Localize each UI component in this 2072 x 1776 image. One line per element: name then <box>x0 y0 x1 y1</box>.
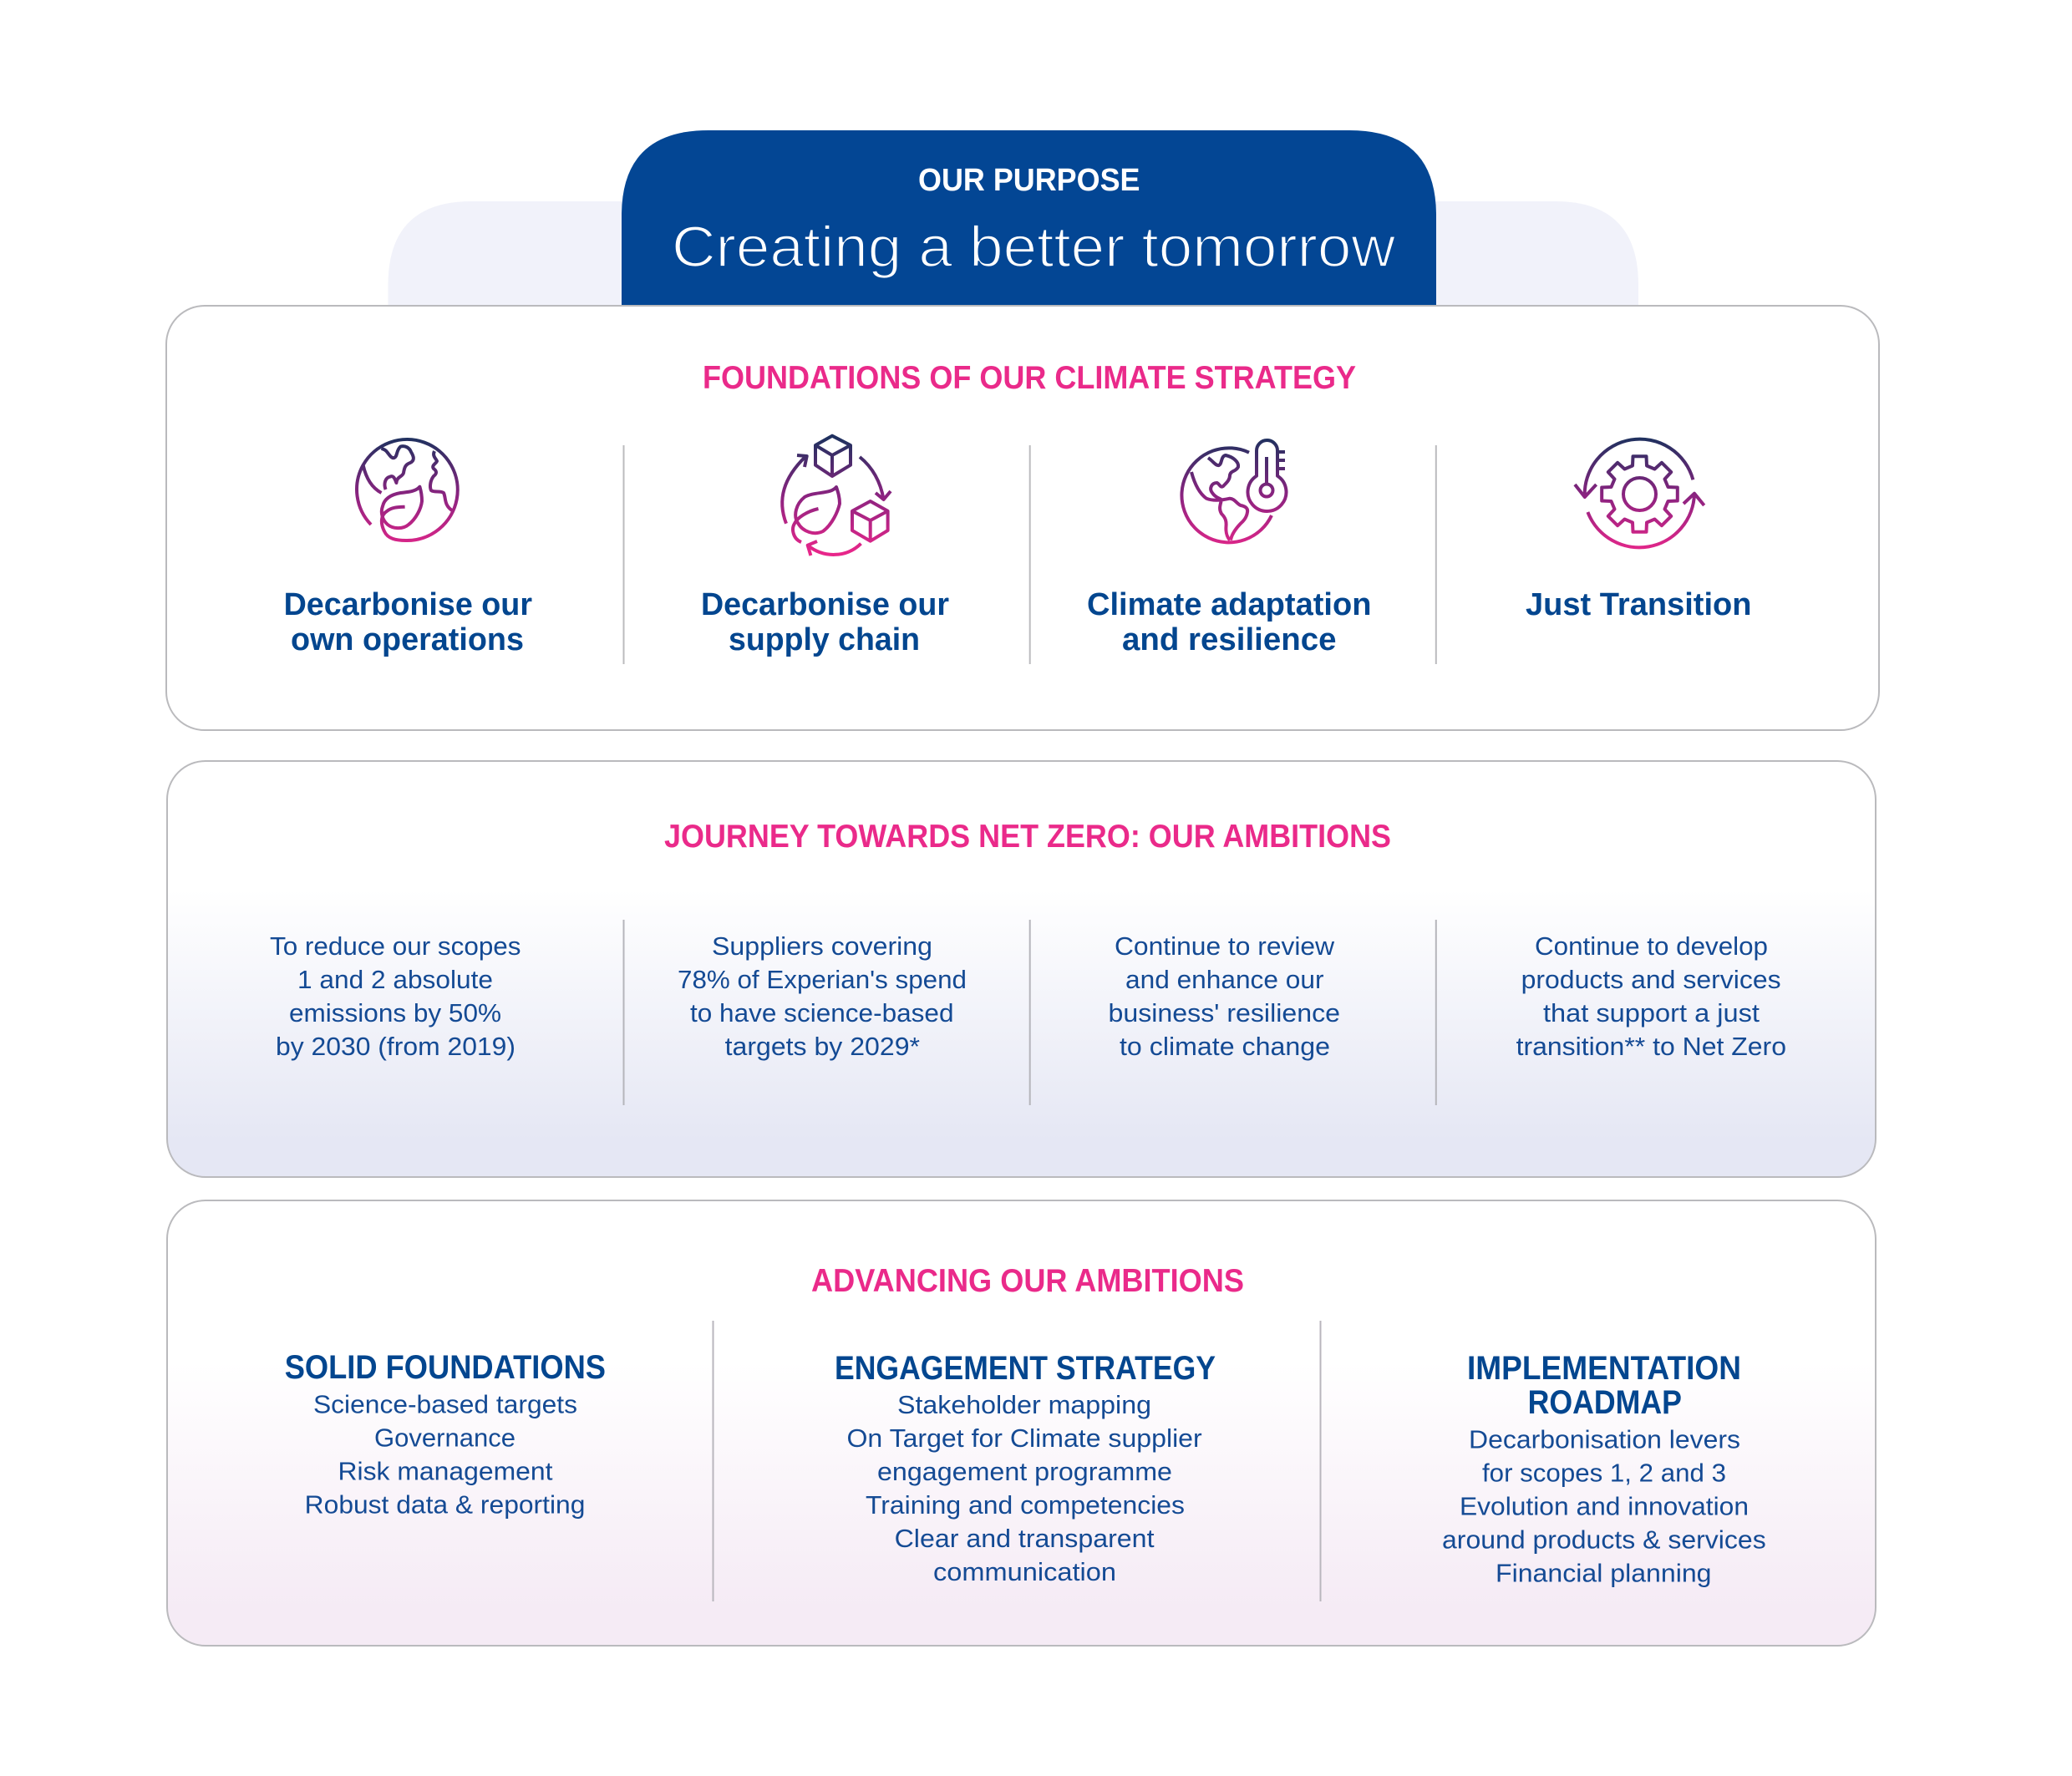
column: implementation roadmap: ROADMAP <box>1528 1384 1682 1421</box>
column: engagement strategy: Training and competencies <box>866 1490 1185 1520</box>
ambition: scopes 1 and 2: by 2030 (from 2019) <box>276 1032 515 1061</box>
ambition: resilience: to climate change <box>1120 1032 1330 1061</box>
column: implementation roadmap: Financial planning <box>1496 1559 1711 1587</box>
column: solid foundations: Governance <box>374 1423 515 1452</box>
ambition: suppliers: Suppliers covering <box>712 931 932 961</box>
ambition: suppliers: to have science-based <box>690 998 954 1028</box>
foundation: decarbonise supply chain <box>701 587 949 657</box>
ambition: resilience: Continue to review <box>1115 931 1335 961</box>
column: engagement strategy: Stakeholder mapping <box>897 1390 1151 1419</box>
icon: globe with leaf <box>357 439 458 540</box>
heading: foundations: FOUNDATIONS OF OUR CLIMATE STRATEGY <box>703 360 1356 396</box>
ambition: just transition: that support a just <box>1543 998 1760 1028</box>
ambition: scopes 1 and 2 <box>270 931 521 1061</box>
column: engagement strategy: communication <box>933 1557 1116 1586</box>
ambition: just transition: Continue to develop <box>1535 931 1768 961</box>
ambition: resilience: business' resilience <box>1108 998 1340 1028</box>
ambition: suppliers <box>678 931 967 1061</box>
ambition: resilience <box>1108 931 1340 1061</box>
foundation: decarbonise own operations: Decarbonise our <box>284 587 532 622</box>
foundation: decarbonise own operations: own operations <box>291 622 524 657</box>
column: solid foundations: Robust data & reporting <box>305 1490 585 1519</box>
foundation: decarbonise supply chain: Decarbonise our <box>701 587 949 622</box>
panel: foundations of our climate strategy <box>166 306 1879 730</box>
heading: advancing: ADVANCING OUR AMBITIONS <box>811 1263 1244 1299</box>
panel: advancing our ambitions <box>167 1200 1876 1646</box>
panel: journey towards net zero <box>167 761 1876 1177</box>
ambition: scopes 1 and 2: To reduce our scopes <box>270 931 521 961</box>
column: implementation roadmap: around products & services <box>1442 1525 1766 1554</box>
column: implementation roadmap: Evolution and innovation <box>1460 1492 1749 1520</box>
column: engagement strategy: engagement programme <box>877 1457 1172 1486</box>
ambition: just transition <box>1516 931 1786 1061</box>
ambition: just transition: transition** to Net Zero <box>1516 1032 1786 1061</box>
ambition: suppliers: 78% of Experian's spend <box>678 965 967 994</box>
icon: globe with thermometer <box>1181 440 1287 542</box>
column: engagement strategy: Clear and transparent <box>895 1524 1155 1553</box>
column: solid foundations: Science-based targets <box>313 1390 577 1418</box>
heading: journey: JOURNEY TOWARDS NET ZERO: OUR AMBITIONS <box>664 819 1391 855</box>
purpose tab <box>622 130 1436 307</box>
foundation: climate adaptation: Climate adaptation <box>1087 587 1372 622</box>
column: engagement strategy: ENGAGEMENT STRATEGY <box>835 1350 1216 1387</box>
column: implementation roadmap: Decarbonisation levers <box>1469 1425 1740 1454</box>
ambition: just transition: products and services <box>1521 965 1781 994</box>
column: engagement strategy: On Target for Climate supplier <box>847 1423 1202 1453</box>
foundation: decarbonise supply chain: supply chain <box>729 622 920 657</box>
foundation: climate adaptation: and resilience <box>1122 622 1337 657</box>
purpose statement: Creating a better tomorrow <box>672 215 1395 279</box>
column: implementation roadmap: IMPLEMENTATION <box>1467 1350 1741 1387</box>
icon: supply chain cubes and leaf <box>782 436 891 556</box>
column: solid foundations <box>285 1349 606 1519</box>
foundation: climate adaptation <box>1087 587 1372 657</box>
column: engagement strategy <box>835 1350 1216 1586</box>
ambition: scopes 1 and 2: 1 and 2 absolute <box>297 965 493 994</box>
purpose label: OUR PURPOSE <box>918 163 1140 198</box>
column: implementation roadmap <box>1442 1350 1766 1587</box>
foundation: just transition: Just Transition <box>1526 587 1751 622</box>
ambition: resilience: and enhance our <box>1125 965 1323 994</box>
column: implementation roadmap: for scopes 1, 2 and 3 <box>1482 1459 1726 1487</box>
ambition: suppliers: targets by 2029* <box>725 1032 920 1061</box>
purpose back tab <box>388 201 1638 307</box>
icon: gear with circular arrows <box>1575 439 1704 547</box>
column: solid foundations: Risk management <box>338 1457 553 1485</box>
foundation: decarbonise own operations <box>284 587 532 657</box>
column: solid foundations: SOLID FOUNDATIONS <box>285 1349 606 1386</box>
ambition: scopes 1 and 2: emissions by 50% <box>289 998 501 1028</box>
